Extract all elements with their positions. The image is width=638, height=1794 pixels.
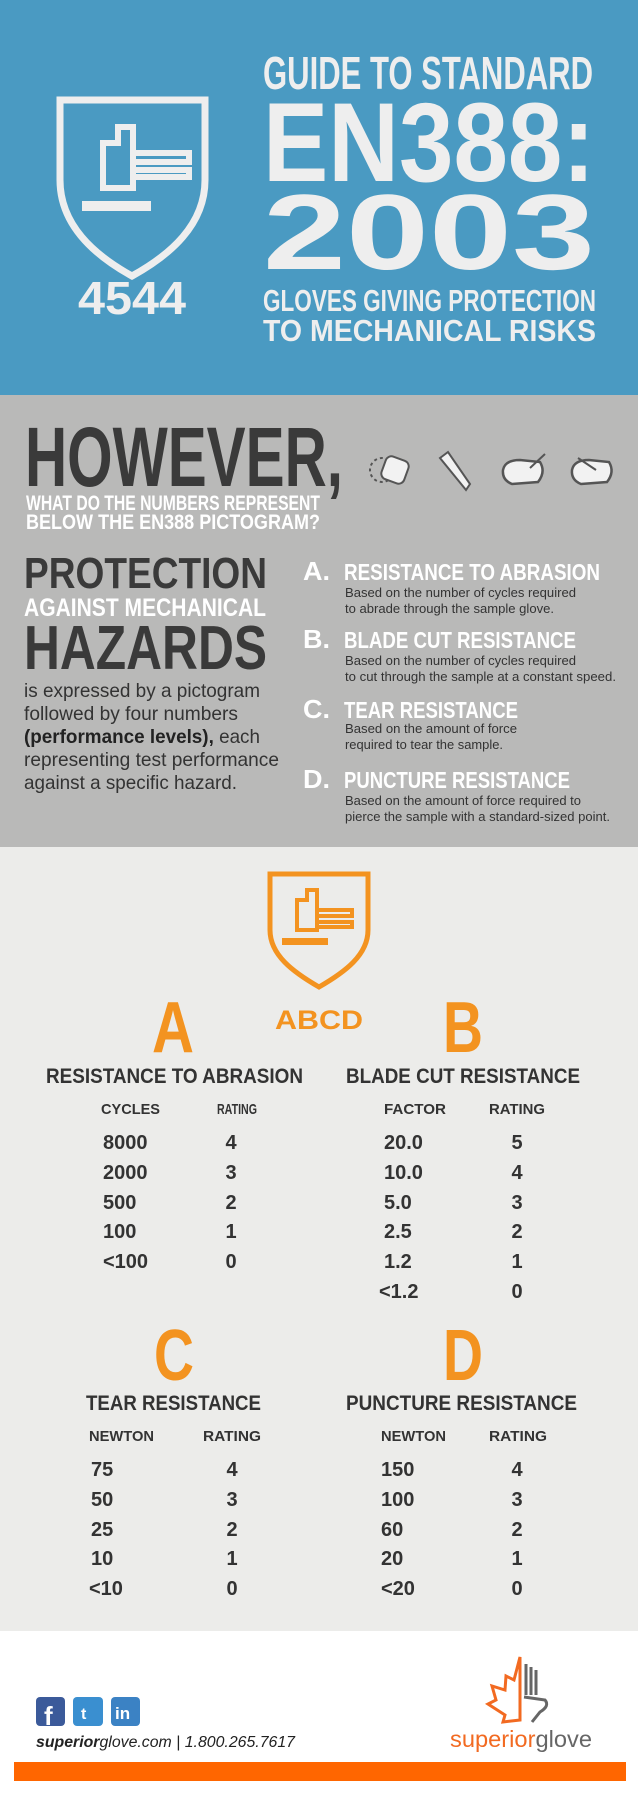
title: TO MECHANICAL RISKS — [263, 313, 596, 348]
table C: tear: 0 — [226, 1578, 238, 1600]
list: hazard types A-D: BLADE CUT RESISTANCE — [344, 627, 576, 653]
table B: blade cut: 5 — [511, 1132, 523, 1154]
icons: social — [36, 1697, 140, 1731]
table C: tear: 1 — [226, 1548, 238, 1570]
table B: blade cut: BLADE CUT RESISTANCE — [346, 1065, 580, 1088]
list: hazard types A-D: Based on the amount of force — [345, 722, 517, 736]
logo: superiorglove — [450, 1657, 592, 1752]
table D: puncture: 100 — [381, 1489, 414, 1511]
table C: tear: 3 — [226, 1489, 238, 1511]
icon: orange shield — [270, 874, 368, 987]
contact text: superiorglove.com | 1.800.265.7617 — [36, 1734, 296, 1751]
table A: abrasion: 0 — [225, 1251, 237, 1273]
list: hazard types A-D: Based on the amount of force required to — [345, 794, 581, 808]
table C: tear: 4 — [226, 1459, 238, 1481]
table B: blade cut: 1.2 — [384, 1251, 412, 1273]
table B: blade cut — [346, 988, 580, 1303]
icon: EN388 shield — [60, 100, 205, 276]
label: ABCD: ABCD — [275, 1005, 363, 1035]
text block: pictogram explanation: is expressed by a pictogram — [24, 680, 260, 702]
table A: abrasion: 100 — [103, 1221, 136, 1243]
table B: blade cut: RATING — [489, 1101, 545, 1118]
heading: protection against mechanical hazards — [24, 549, 267, 683]
table B: blade cut: 4 — [511, 1162, 523, 1184]
table D: puncture: 150 — [381, 1459, 414, 1481]
table C: tear: RATING — [203, 1428, 261, 1445]
text block: pictogram explanation: representing test performance — [24, 749, 279, 771]
table D: puncture: 20 — [381, 1548, 403, 1570]
table B: blade cut: 10.0 — [384, 1162, 423, 1184]
table B: blade cut: 3 — [511, 1192, 523, 1214]
table C: tear: TEAR RESISTANCE — [86, 1392, 261, 1415]
list: hazard types A-D: to cut through the sample at a constant speed. — [345, 670, 616, 684]
table A: abrasion: <100 — [103, 1251, 148, 1273]
icons: social: in — [115, 1704, 130, 1723]
table D: puncture: PUNCTURE RESISTANCE — [346, 1392, 577, 1415]
title — [263, 47, 596, 348]
logo: superiorglove: superiorglove — [450, 1726, 592, 1752]
table D: puncture: <20 — [381, 1578, 415, 1600]
list: hazard types A-D — [303, 556, 616, 824]
text block: pictogram explanation — [24, 680, 279, 794]
table D: puncture: 4 — [511, 1459, 523, 1481]
table B: blade cut: <1.2 — [379, 1281, 418, 1303]
rating number: 4544 — [78, 272, 186, 324]
table D: puncture — [346, 1316, 577, 1600]
list: hazard types A-D: A. — [303, 556, 330, 586]
table B: blade cut: 0 — [511, 1281, 523, 1303]
table A: abrasion: RESISTANCE TO ABRASION — [46, 1065, 303, 1088]
text block: pictogram explanation: (performance levels), each — [24, 726, 260, 748]
subheading question — [26, 492, 320, 534]
orange bar — [14, 1762, 626, 1781]
table A: abrasion: 2000 — [103, 1162, 148, 1184]
table D: puncture: 3 — [511, 1489, 523, 1511]
table A: abrasion: 2 — [225, 1192, 237, 1214]
table D: puncture: NEWTON — [381, 1428, 446, 1445]
table B: blade cut: 1 — [511, 1251, 523, 1273]
list: hazard types A-D: required to tear the sample. — [345, 738, 503, 752]
list: hazard types A-D: Based on the number of cycles required — [345, 654, 576, 668]
table A: abrasion: A — [152, 988, 194, 1068]
table C: tear: 25 — [91, 1519, 113, 1541]
table C: tear: 2 — [226, 1519, 238, 1541]
list: hazard types A-D: B. — [303, 624, 330, 654]
table D: puncture: D — [443, 1316, 483, 1396]
table B: blade cut: 20.0 — [384, 1132, 423, 1154]
icons: social: t — [81, 1706, 87, 1723]
table A: abrasion: CYCLES — [101, 1101, 160, 1118]
table D: puncture: 60 — [381, 1519, 403, 1541]
table A: abrasion: 500 — [103, 1192, 136, 1214]
panel: rating tables — [0, 847, 638, 1631]
table C: tear: 75 — [91, 1459, 113, 1481]
table A: abrasion: RATING — [217, 1101, 257, 1118]
table D: puncture: 0 — [511, 1578, 523, 1600]
title: EN388: — [263, 80, 595, 205]
footer — [0, 1631, 638, 1794]
table B: blade cut: 2.5 — [384, 1221, 412, 1243]
list: hazard types A-D: TEAR RESISTANCE — [344, 697, 518, 723]
list: hazard types A-D: C. — [303, 694, 330, 724]
table B: blade cut: 5.0 — [384, 1192, 412, 1214]
table A: abrasion — [46, 988, 303, 1273]
panel: explanation — [0, 395, 638, 847]
table C: tear — [86, 1316, 261, 1600]
table A: abrasion: 3 — [225, 1162, 237, 1184]
list: hazard types A-D: Based on the number of cycles required — [345, 586, 576, 600]
heading: protection against mechanical hazards: PROTECTION — [24, 549, 267, 598]
table B: blade cut: B — [443, 988, 483, 1068]
table A: abrasion: 4 — [225, 1132, 237, 1154]
table A: abrasion: 8000 — [103, 1132, 148, 1154]
table A: abrasion: 1 — [225, 1221, 237, 1243]
text block: pictogram explanation: against a specific hazard. — [24, 772, 237, 794]
text block: pictogram explanation: followed by four numbers — [24, 703, 238, 725]
table C: tear: 10 — [91, 1548, 113, 1570]
table D: puncture: 1 — [511, 1548, 523, 1570]
table C: tear: C — [154, 1316, 194, 1396]
subheading question: BELOW THE EN388 PICTOGRAM? — [26, 511, 320, 534]
table D: puncture: 2 — [511, 1519, 523, 1541]
table C: tear: 50 — [91, 1489, 113, 1511]
icons: hazards — [370, 452, 612, 490]
icons: social: f — [44, 1701, 53, 1731]
list: hazard types A-D: to abrade through the sample glove. — [345, 602, 554, 616]
title: 2003 — [263, 172, 595, 292]
subheading question: WHAT DO THE NUMBERS REPRESENT — [26, 492, 320, 515]
table C: tear: <10 — [89, 1578, 123, 1600]
list: hazard types A-D: pierce the sample with a standard-sized point. — [345, 810, 610, 824]
header panel — [0, 0, 638, 395]
table B: blade cut: 2 — [511, 1221, 523, 1243]
list: hazard types A-D: PUNCTURE RESISTANCE — [344, 767, 570, 793]
heading: however: HOWEVER, — [25, 410, 343, 504]
table C: tear: NEWTON — [89, 1428, 154, 1445]
heading: protection against mechanical hazards: HAZARDS — [24, 614, 267, 683]
table B: blade cut: FACTOR — [384, 1101, 446, 1118]
list: hazard types A-D: D. — [303, 764, 330, 794]
table D: puncture: RATING — [489, 1428, 547, 1445]
heading: protection against mechanical hazards: AGAINST MECHANICAL — [24, 594, 266, 622]
